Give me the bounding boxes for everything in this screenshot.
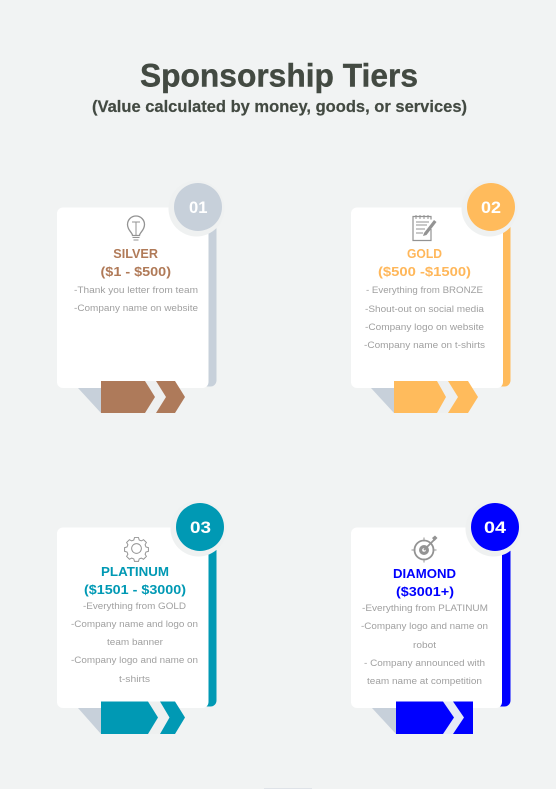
benefits: -Shout-out on social media (365, 304, 485, 315)
number badge: 03 (190, 519, 211, 537)
benefits: -Company logo and name on (71, 655, 198, 666)
arrow shadow (78, 386, 101, 413)
tier value: ($1501 - $3000) (84, 582, 186, 597)
benefits (361, 603, 488, 687)
benefits: -Company name and logo on (71, 619, 198, 630)
subtitle: (Value calculated by money, goods, or services) (92, 98, 467, 116)
benefits (71, 601, 198, 685)
card (57, 208, 208, 388)
benefits: -Thank you letter from team (74, 285, 198, 296)
tier name: PLATINUM (101, 565, 169, 579)
number badge (170, 500, 226, 556)
arrow shadow (372, 706, 396, 734)
tier name: DIAMOND (393, 567, 456, 581)
tier value: ($500 -$1500) (378, 264, 471, 279)
side bar (198, 540, 216, 706)
side bar (492, 540, 510, 706)
benefits: -Company logo and name on (361, 621, 488, 632)
tier value: ($3001+) (396, 584, 454, 599)
card (351, 208, 503, 388)
tier value: ($1 - $500) (100, 264, 171, 279)
number badge (168, 180, 224, 236)
panel: diamond tier (351, 500, 522, 734)
benefits: team name at competition (367, 676, 482, 687)
benefits: -Everything from GOLD (83, 601, 186, 612)
side bar (198, 220, 216, 386)
tier name: SILVER (113, 247, 158, 261)
arrow banner (394, 381, 478, 413)
tier name: GOLD (407, 247, 442, 261)
panel: silver tier (57, 180, 224, 413)
benefits (364, 285, 485, 351)
benefits: -Company logo on website (365, 322, 484, 333)
icon: target with dart (412, 536, 438, 562)
arrow shadow (371, 386, 394, 413)
title: Sponsorship Tiers (140, 58, 418, 94)
side bar (492, 220, 510, 386)
benefits: t-shirts (119, 674, 150, 685)
arrow banner (101, 702, 185, 734)
icon: light bulb (128, 216, 144, 240)
number badge: 04 (484, 519, 507, 537)
benefits: -Company name on website (74, 303, 198, 314)
number badge: 02 (481, 199, 501, 217)
benefits: robot (413, 640, 436, 651)
arrow banner (101, 381, 185, 413)
number badge: 01 (189, 199, 208, 217)
benefits: -Company name on t-shirts (364, 340, 485, 351)
benefits: -Everything from PLATINUM (362, 603, 488, 614)
arrow banner (396, 702, 473, 734)
icon: notepad and pencil (413, 215, 436, 240)
number badge (466, 500, 522, 556)
panel: platinum tier (57, 500, 226, 734)
icon: gear (125, 538, 148, 561)
card (351, 528, 502, 708)
arrow shadow (78, 706, 101, 734)
number badge (462, 180, 518, 236)
benefits: - Everything from BRONZE (366, 285, 483, 296)
card (57, 528, 208, 708)
panel: gold tier (351, 180, 518, 413)
benefits (74, 285, 198, 314)
benefits: team banner (107, 637, 164, 648)
benefits: - Company announced with (364, 658, 485, 669)
